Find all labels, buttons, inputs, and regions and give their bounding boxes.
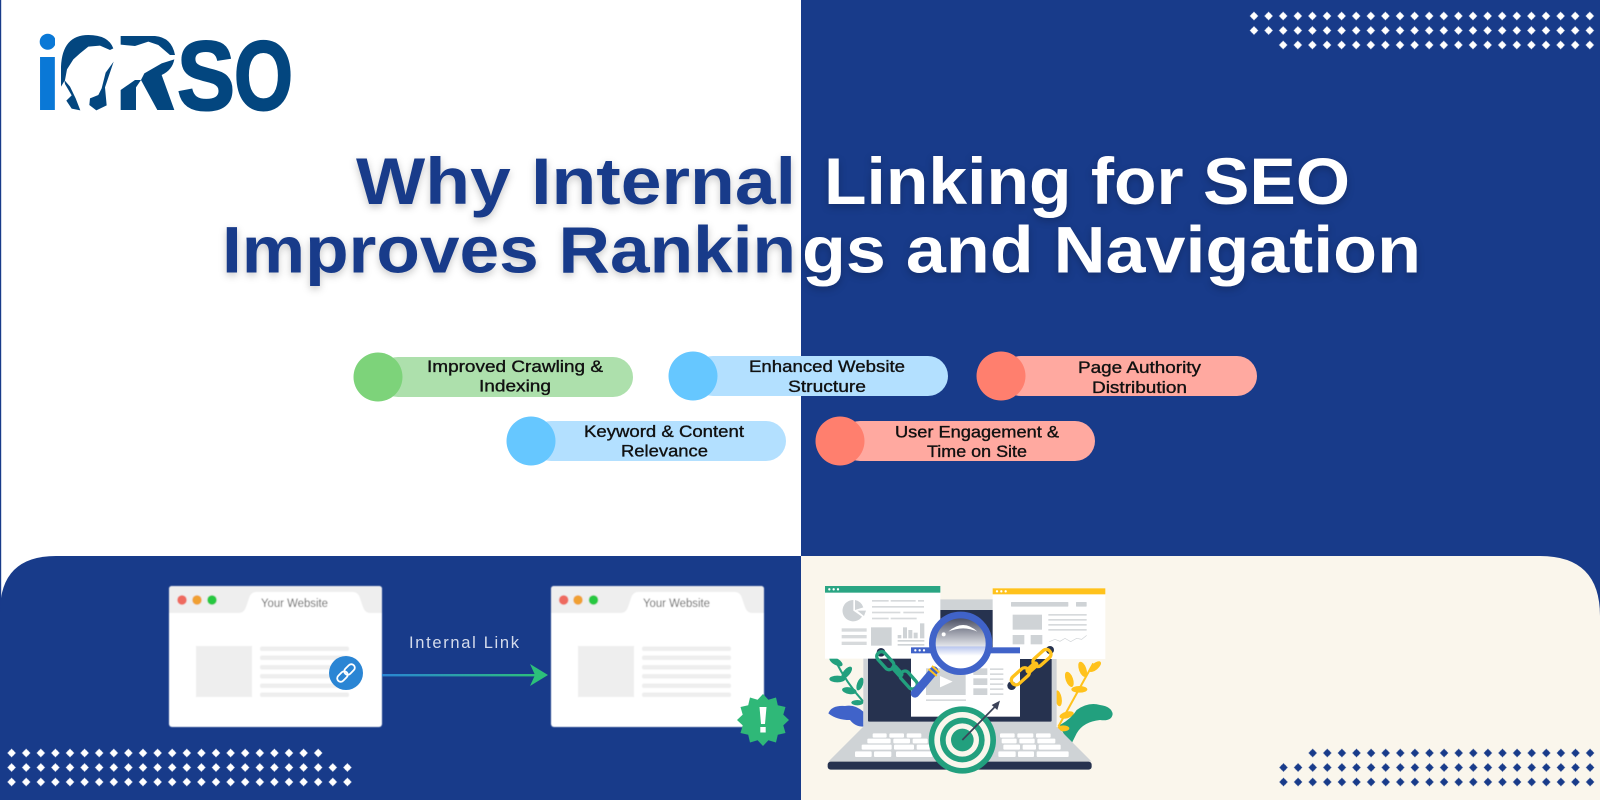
dot pattern: bottom right [1276, 746, 1597, 789]
title: Why Internal [356, 144, 796, 218]
pill: Page Authority Distribution [976, 352, 1257, 400]
panel: bottom left navy [0, 556, 801, 800]
plant: left green [828, 655, 865, 727]
logo letters S and O: S [177, 20, 235, 130]
logo letters C and R: C [56, 20, 118, 132]
icon: target with arrow [929, 701, 1000, 774]
pill: Improved Crawling & Indexing: Improved Crawling & [427, 358, 603, 376]
pill: User Engagement & Time on Site: User Engagement & [895, 424, 1059, 442]
pill: Enhanced Website Structure: Enhanced Website [749, 358, 905, 376]
icon: green alert badge [737, 694, 789, 746]
logo letter i: i [32, 20, 62, 132]
title [222, 144, 1421, 286]
pill: Improved Crawling & Indexing [354, 352, 633, 402]
pill: Keyword & Content Relevance [506, 416, 786, 466]
browser window: target page: Your Website [643, 598, 710, 610]
icon: magnifying glass [915, 615, 989, 693]
title: Linking for SEO [824, 144, 1350, 218]
icon: yellow chain [1007, 646, 1054, 690]
window: analytics green [825, 586, 940, 659]
icon: green chain [875, 648, 919, 691]
label: Internal Link: Internal Link [409, 634, 520, 652]
dot pattern: bottom left [4, 746, 355, 789]
logo: iCRSO: O [234, 20, 293, 130]
pill: Keyword & Content Relevance: Relevance [621, 442, 708, 460]
browser window: source page [169, 586, 382, 727]
window: report yellow [993, 588, 1105, 659]
illustration: SEO laptop [825, 586, 1113, 774]
dot pattern: top right [1247, 9, 1597, 52]
pill: User Engagement & Time on Site [816, 416, 1095, 466]
arrow: internal link [382, 664, 548, 686]
pill: Page Authority Distribution: Distribution [1092, 379, 1187, 397]
pill: Enhanced Website Structure [668, 352, 948, 400]
plant: right yellow [1054, 659, 1113, 743]
icon: link badge [329, 656, 363, 690]
pill: Keyword & Content Relevance: Keyword & Content [584, 423, 744, 441]
pill: Enhanced Website Structure: Structure [788, 378, 866, 396]
logo: iCRSO [40, 34, 291, 112]
pill: User Engagement & Time on Site: Time on Site [927, 443, 1027, 461]
browser window: source page: Your Website [261, 598, 328, 610]
window: video center [911, 647, 1020, 717]
title: Improves Rankin [222, 212, 796, 286]
laptop [828, 599, 1092, 770]
browser window: target page [551, 586, 764, 727]
title: gs and Navigation [802, 212, 1421, 286]
pill: Page Authority Distribution: Page Authority [1078, 359, 1202, 377]
panel: bottom right cream [801, 556, 1600, 800]
logo: polar bear silhouette [55, 30, 178, 113]
pill: Improved Crawling & Indexing: Indexing [479, 378, 551, 396]
logo: iCRSO: R [115, 20, 178, 132]
